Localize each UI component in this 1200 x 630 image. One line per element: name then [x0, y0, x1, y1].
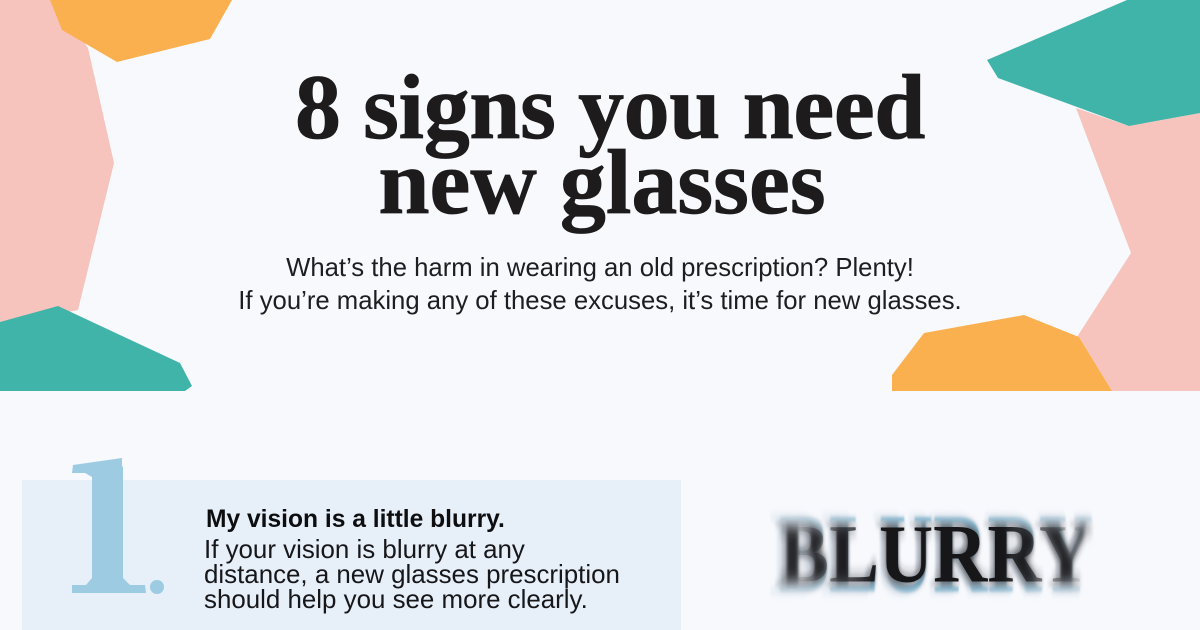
illustration: blurry word: BLURRY — [769, 488, 1093, 621]
number 1: 1 — [60, 424, 155, 630]
subtitle: What’s the harm in wearing an old prescription? Plenty! — [286, 254, 914, 282]
panel: sign 1 background — [22, 480, 681, 630]
illustration: blurry word: BLURRY — [779, 492, 1093, 616]
title: 8 signs you need — [295, 56, 925, 158]
illustration: blurry word: BLURRY — [774, 501, 1088, 607]
number 1 — [72, 458, 164, 594]
illustration: blurry word: BLURRY — [779, 508, 1093, 601]
shape: top-left orange — [50, 0, 232, 62]
subtitle — [238, 254, 962, 315]
sign 1 description: If your vision is blurry at any — [204, 536, 525, 564]
shape: left pink — [0, 0, 114, 325]
title: new glasses — [378, 131, 826, 233]
subtitle: If you’re making any of these excuses, it’s time for new glasses. — [238, 287, 962, 315]
shape: top-right teal — [987, 0, 1200, 126]
title — [295, 56, 925, 234]
sign 1 heading: My vision is a little blurry. — [206, 506, 505, 533]
shape: bottom-right orange — [892, 315, 1112, 391]
shape: bottom-left teal — [0, 306, 192, 391]
text block: sign 1 — [204, 506, 620, 614]
shape: right pink — [1076, 108, 1200, 391]
sign 1 description: distance, a new glasses prescription — [204, 561, 620, 589]
sign 1 description — [204, 536, 620, 614]
illustration: blurry word: BLURRY — [779, 509, 1093, 600]
sign 1 description: should help you see more clearly. — [204, 586, 588, 614]
